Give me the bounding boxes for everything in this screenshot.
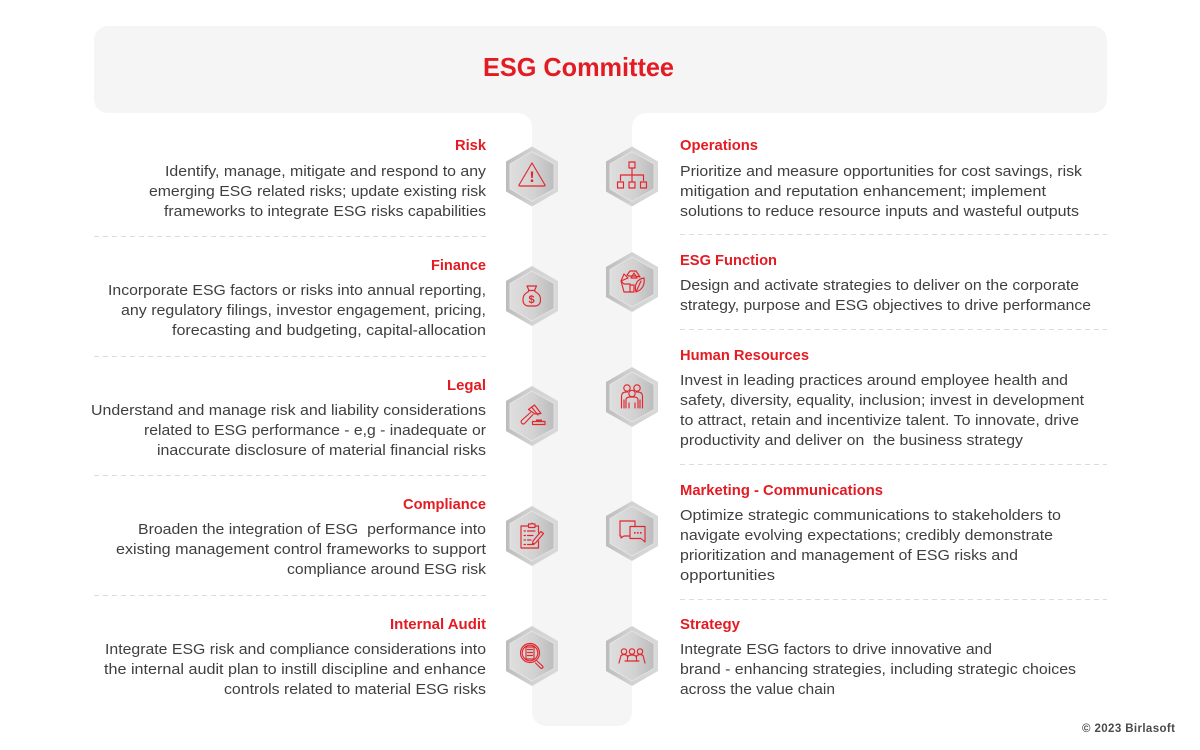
panel: Internal Audit: controls related to material ESG risks [224,681,486,698]
panel: ESG Function [680,252,1091,314]
panel: Risk: Identify, manage, mitigate and respond to any [165,163,487,180]
panel: Legal: Understand and manage risk and liability considerations [91,402,486,419]
background panel: header and central spine [94,26,1107,726]
panel: Finance [108,257,486,339]
panel: Legal [91,377,486,459]
panel: Human Resources: safety, diversity, equality, inclusion; invest in development [680,392,1085,409]
panel: ESG Function: ESG Function [680,252,777,269]
icon: money bag [506,266,558,326]
icon: money bag: $ [528,294,535,306]
title: ESG Committee [483,52,674,82]
panel: Strategy: Integrate ESG factors to drive innovative and [680,641,992,658]
panel: Operations: mitigation and reputation enhancement; implement [680,183,1047,200]
panel: Risk: emerging ESG related risks; update existing risk [149,183,487,200]
panel: Risk: Risk [455,137,487,154]
icon: audit magnifier [506,626,558,686]
panel: Compliance [116,496,487,578]
panel: Marketing - Communications: Optimize strategic communications to stakeholders to [680,507,1061,524]
icon: recycling and leaf [606,252,658,312]
panel: Operations: Prioritize and measure opportunities for cost savings, risk [680,163,1083,180]
panel: Risk: frameworks to integrate ESG risks capabilities [164,203,486,220]
panel: Finance: forecasting and budgeting, capital-allocation [172,322,486,339]
panel: Marketing - Communications: navigate evolving expectations; credibly demonstrate [680,527,1053,544]
icon: people group [606,367,658,427]
icon: meeting team [606,626,658,686]
panel: Risk [149,137,487,220]
panel: Internal Audit: the internal audit plan to instill discipline and enhance [104,661,486,678]
panel: ESG Function: Design and activate strategies to deliver on the corporate [680,277,1079,294]
panel: Human Resources: Human Resources [680,347,809,364]
panel: Legal: related to ESG performance - e,g - inadequate or [144,422,486,439]
panel: Strategy: Strategy [680,616,741,633]
panel: Human Resources: Invest in leading practices around employee health and [680,372,1068,389]
panel: Compliance: existing management control frameworks to support [116,541,487,558]
panel: Finance: any regulatory filings, investor engagement, pricing, [121,302,486,319]
panel: Human Resources: to attract, retain and incentivize talent. To innovate, drive [680,412,1079,429]
panel: ESG Function: strategy, purpose and ESG objectives to drive performance [680,297,1091,314]
panel: Compliance: Compliance [403,496,486,513]
panel: Human Resources [680,347,1085,449]
panel: Finance: Finance [431,257,486,274]
icon: clipboard checklist [506,506,558,566]
panel: Internal Audit: Internal Audit [390,616,486,633]
panel: Marketing - Communications: prioritization and management of ESG risks and [680,547,1018,564]
panel: Strategy: brand - enhancing strategies, including strategic choices [680,661,1076,678]
copyright: © 2023 Birlasoft [1082,723,1175,735]
panel: Legal: inaccurate disclosure of material financial risks [157,442,486,459]
panel: Legal: Legal [447,377,486,394]
panel: Marketing - Communications [680,482,1061,584]
panel: Human Resources: productivity and deliver on the business strategy [680,432,1024,449]
icon: speech bubbles [606,501,658,561]
panel: Marketing - Communications: opportunities [680,567,775,584]
icon: risk warning triangle [506,146,558,206]
panel: Compliance: compliance around ESG risk [287,561,487,578]
panel: Marketing - Communications: Marketing - Communications [680,482,883,499]
panel: Operations: Operations [680,137,758,154]
panel: Operations: solutions to reduce resource inputs and wasteful outputs [680,203,1079,220]
panel: Internal Audit: Integrate ESG risk and compliance considerations into [105,641,486,658]
panel: Strategy [680,616,1076,698]
panel: Compliance: Broaden the integration of ESG performance into [138,521,486,538]
icon: gavel [506,386,558,446]
panel: Internal Audit [104,616,486,698]
icon: organisation hierarchy [606,146,658,206]
panel: Operations [680,137,1083,220]
panel: Strategy: across the value chain [680,681,835,698]
panel: Finance: Incorporate ESG factors or risks into annual reporting, [108,282,486,299]
